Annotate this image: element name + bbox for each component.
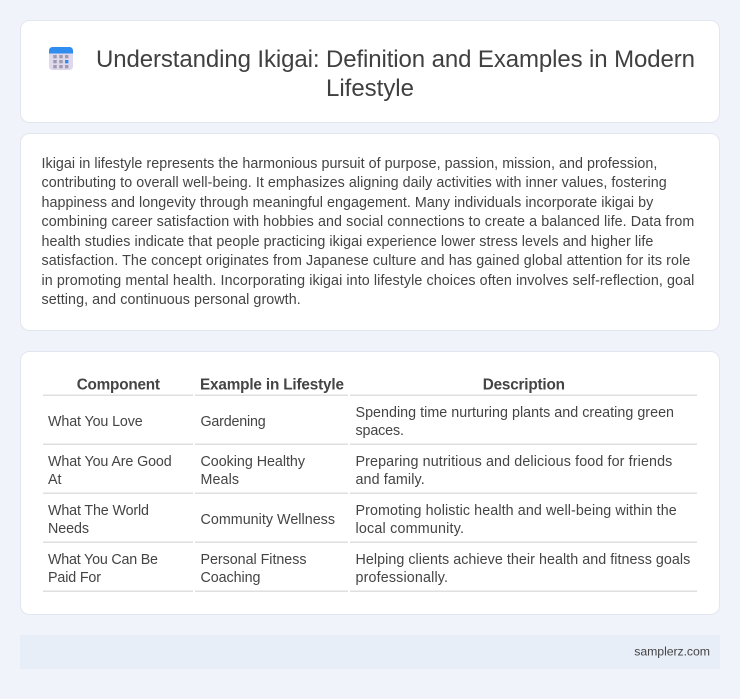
table row: what you are good at (48, 454, 672, 488)
table row: what you can be paid for: What You Can Be (48, 552, 158, 568)
text block: ikigai summary: setting, and continuous personal growth. (42, 292, 301, 308)
table row: what the world needs (48, 503, 677, 537)
table row: what the world needs: Community Wellness (200, 512, 335, 528)
text block: ikigai summary: Ikigai in lifestyle represents the harmonious pursuit of purpose, passion, mission, and profession, (42, 156, 657, 172)
table header: Description (483, 376, 565, 393)
table row: what the world needs: What The World (48, 503, 149, 519)
text block: ikigai summary: combining career satisfaction with hobbies and social connections to create a balanced life. Data from (42, 214, 694, 230)
title: Lifestyle (326, 75, 414, 102)
table row: what you are good at: What You Are Good (48, 454, 172, 470)
table row: what you love: Spending time nurturing plants and creating green (356, 405, 674, 421)
table row: what you love (48, 405, 674, 439)
table row: what the world needs: local community. (356, 521, 464, 537)
table row: what you are good at: Preparing nutritious and delicious food for friends (356, 454, 672, 470)
table row: what you can be paid for: Helping clients achieve their health and fitness goals (356, 552, 690, 568)
table row: what you are good at: At (48, 472, 62, 488)
text block: ikigai summary: contributing to overall well-being. It emphasizes aligning daily activities with inner values, fostering (42, 175, 667, 191)
table row: what you can be paid for (48, 552, 690, 586)
table row: what you are good at: and family. (356, 472, 425, 488)
text block: ikigai summary: in promoting mental health. Incorporating ikigai into lifestyle choices often involves self-reflection, goal (42, 273, 694, 289)
table header: Example in Lifestyle (200, 376, 344, 393)
title (96, 46, 695, 102)
footer bar (20, 635, 720, 669)
text block: ikigai summary: happiness and longevity through meaningful engagement. Many individuals incorporate ikigai by (42, 195, 654, 211)
panel: table (20, 352, 720, 614)
table row: what you love: Gardening (200, 414, 266, 430)
table row: what you love: spaces. (356, 423, 404, 439)
footer source text: samplerz.com (634, 645, 710, 659)
table row: what you can be paid for: Paid For (48, 570, 101, 586)
table row: what the world needs: Needs (48, 521, 89, 537)
table header: Component (77, 376, 160, 393)
table row: what the world needs: Promoting holistic health and well-being within the (356, 503, 677, 519)
panel: introduction (20, 134, 720, 330)
text block: ikigai summary: satisfaction. The concept originates from Japanese culture and has gained global attention for its role (42, 253, 690, 269)
table row: what you are good at: Meals (200, 472, 239, 488)
table row: what you can be paid for: Personal Fitness (200, 552, 306, 568)
icon: calendar (49, 47, 73, 70)
table row: what you love: What You Love (48, 414, 143, 430)
table row: what you are good at: Cooking Healthy (200, 454, 306, 470)
text block: ikigai summary: health studies indicate that people practicing ikigai experience lower stress levels and higher life (42, 234, 653, 250)
title: Understanding Ikigai: Definition and Examples in Modern (96, 46, 695, 73)
panel: header (20, 20, 720, 122)
table header (77, 376, 565, 393)
table row: what you can be paid for: professionally. (356, 570, 448, 586)
table row: what you can be paid for: Coaching (200, 570, 261, 586)
text block: ikigai summary (42, 156, 694, 308)
